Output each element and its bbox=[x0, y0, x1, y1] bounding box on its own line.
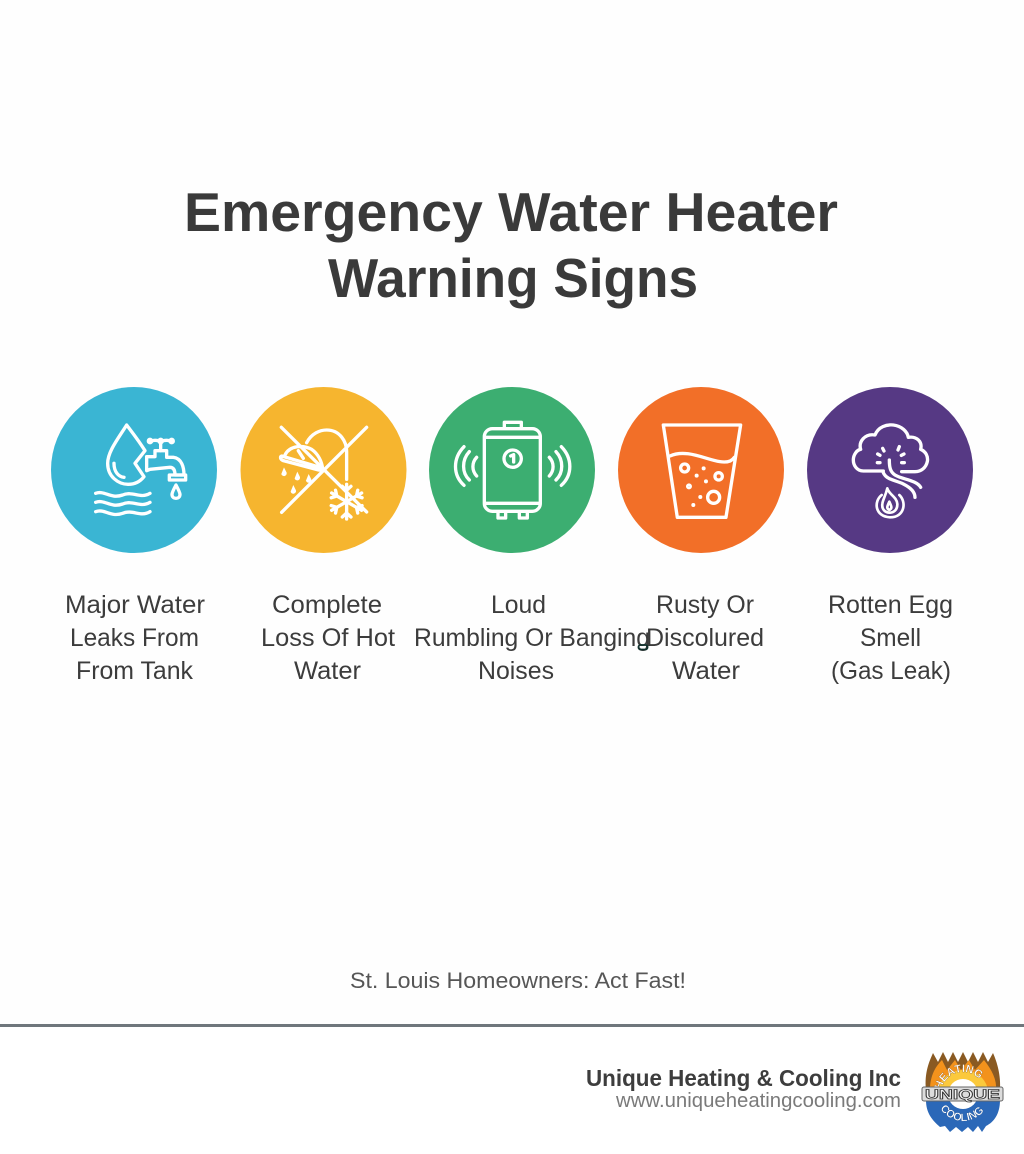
label: complete loss of hot water: Loss Of Hot bbox=[261, 624, 395, 652]
label: complete loss of hot water: Water bbox=[294, 657, 361, 685]
label: loud rumbling or banging noises: Rumbling Or Banging bbox=[414, 624, 650, 652]
company logo bbox=[922, 1052, 1004, 1132]
company website: www.uniqueheatingcooling.com bbox=[615, 1090, 901, 1112]
panel: complete loss of hot water bbox=[240, 387, 406, 685]
label: major water leaks: From Tank bbox=[76, 657, 193, 685]
icon: water drop, faucet and waves bbox=[51, 387, 217, 553]
label: rusty or discolored water: Rusty Or bbox=[656, 591, 754, 619]
panel: loud rumbling or banging noises bbox=[414, 387, 650, 685]
label: loud rumbling or banging noises: Loud bbox=[491, 591, 546, 619]
label: major water leaks bbox=[65, 591, 205, 685]
icon: gas cloud and flame bbox=[807, 387, 973, 553]
label: major water leaks: Major Water bbox=[65, 591, 205, 619]
label: loud rumbling or banging noises bbox=[414, 591, 650, 685]
label: complete loss of hot water bbox=[261, 591, 395, 685]
icon: vibrating water heater tank bbox=[429, 387, 595, 553]
label: rotten egg smell: Rotten Egg bbox=[828, 591, 953, 619]
text artifact at the overlapping labels bbox=[638, 645, 648, 650]
label: rotten egg smell bbox=[828, 591, 953, 685]
company logo: UNIQUE bbox=[925, 1086, 1000, 1102]
title: Warning Signs bbox=[328, 247, 698, 309]
label: loud rumbling or banging noises: Noises bbox=[478, 657, 554, 685]
label: rotten egg smell: Smell bbox=[860, 624, 921, 652]
panel: rusty or discolored water bbox=[618, 387, 784, 685]
call to action: St. Louis Homeowners: Act Fast! bbox=[350, 968, 686, 993]
panel: major water leaks bbox=[51, 387, 217, 685]
label: rotten egg smell: (Gas Leak) bbox=[831, 657, 951, 685]
label: rusty or discolored water: Water bbox=[672, 657, 740, 685]
icon: crossed-out shower and snowflake bbox=[240, 387, 406, 553]
company name: Unique Heating & Cooling Inc bbox=[586, 1065, 901, 1091]
label: major water leaks: Leaks From bbox=[70, 624, 199, 652]
company logo: COOLING bbox=[941, 1105, 984, 1122]
panel: rotten egg smell bbox=[807, 387, 973, 685]
footer bbox=[0, 1024, 1024, 1132]
icon: glass of discolored water bbox=[618, 387, 784, 553]
label: rusty or discolored water: Discolured bbox=[646, 624, 764, 652]
title bbox=[184, 181, 838, 309]
company logo: HEATING bbox=[934, 1064, 983, 1086]
title: Emergency Water Heater bbox=[184, 181, 838, 243]
label: complete loss of hot water: Complete bbox=[272, 591, 382, 619]
label: rusty or discolored water bbox=[646, 591, 764, 685]
